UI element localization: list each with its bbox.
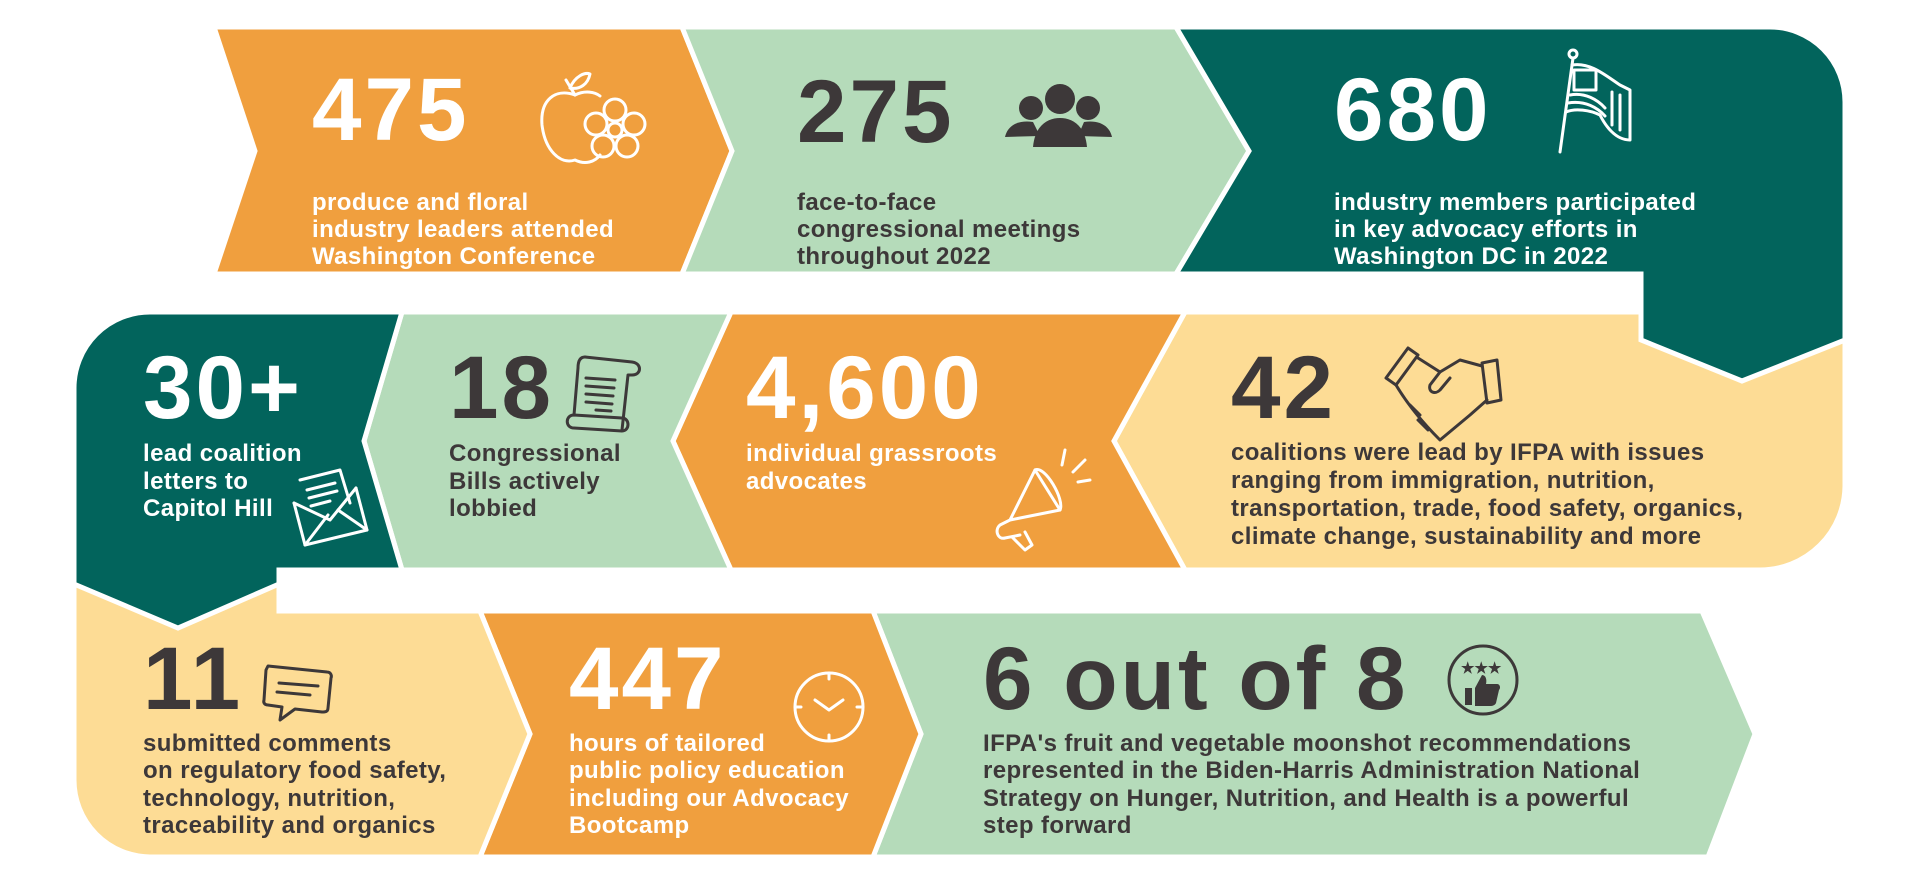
stat 11: submitted comments <box>143 730 392 757</box>
stat 30+: letters to <box>143 468 248 495</box>
stat 475: Washington Conference <box>312 243 596 270</box>
icon: clock <box>795 673 863 741</box>
icon: chat <box>264 666 331 720</box>
stat 275: 275 <box>797 61 954 161</box>
stat 18 <box>449 337 621 522</box>
stat 42: climate change, sustainability and more <box>1231 523 1701 550</box>
stat 18: Congressional <box>449 440 621 467</box>
stat 42: coalitions were lead by IFPA with issues <box>1231 439 1704 466</box>
stat 275: face-to-face <box>797 189 937 216</box>
stat 18: Bills actively <box>449 468 600 495</box>
stat 275 <box>797 61 1081 270</box>
icon: envelope <box>294 470 367 545</box>
panel: row2 teal <box>74 312 402 628</box>
stat 11: on regulatory food safety, <box>143 757 446 784</box>
stat 4,600: advocates <box>746 468 867 495</box>
stat 18: lobbied <box>449 495 537 522</box>
stat 30+: Capitol Hill <box>143 495 273 522</box>
stat 6 out of 8: represented in the Biden-Harris Administration National <box>983 757 1640 784</box>
stat 680: industry members participated <box>1334 189 1696 216</box>
stat 11: traceability and organics <box>143 812 436 839</box>
stat 42: ranging from immigration, nutrition, <box>1231 467 1655 494</box>
stat 4,600: 4,600 <box>746 337 984 437</box>
panel: row1 green <box>682 27 1249 274</box>
stat 475: produce and floral <box>312 189 529 216</box>
stat 447: including our Advocacy <box>569 785 849 812</box>
panel: row2 yellow <box>1114 312 1845 570</box>
icon: people <box>1005 84 1112 147</box>
panel: row2 green <box>364 312 731 570</box>
stat 30+: 30+ <box>143 337 303 437</box>
stat 475 <box>312 59 614 270</box>
stat 680: Washington DC in 2022 <box>1334 243 1608 270</box>
stat 275: congressional meetings <box>797 216 1081 243</box>
panel: row3 yellow <box>74 560 530 857</box>
stat 42: 42 <box>1231 337 1336 437</box>
stat 6 out of 8 <box>983 628 1640 839</box>
stat 30+ <box>143 337 303 522</box>
stat 4,600: individual grassroots <box>746 440 997 467</box>
stat 11 <box>143 628 446 839</box>
stat 6 out of 8: 6 out of 8 <box>983 628 1409 728</box>
icon: apple and flower <box>542 74 645 162</box>
stat 6 out of 8: Strategy on Hunger, Nutrition, and Health is a powerful <box>983 785 1629 812</box>
stat 680: 680 <box>1334 59 1492 159</box>
stat 6 out of 8: step forward <box>983 812 1132 839</box>
panel: row1 teal <box>1176 27 1845 381</box>
stat 447: 447 <box>569 628 726 728</box>
stat 11: technology, nutrition, <box>143 785 395 812</box>
panel: row3 orange <box>480 611 921 857</box>
stat 447: hours of tailored <box>569 730 765 757</box>
stat 447: Bootcamp <box>569 812 690 839</box>
stat 18: 18 <box>449 337 554 437</box>
stat 447: public policy education <box>569 757 845 784</box>
stat 680: in key advocacy efforts in <box>1334 216 1638 243</box>
panel: row1 orange <box>214 27 732 274</box>
icon: thumbs up stars <box>1449 646 1517 714</box>
panel: row3 green <box>873 611 1755 857</box>
icon: flag <box>1560 50 1630 152</box>
stat 4,600 <box>746 337 997 495</box>
stat 275: throughout 2022 <box>797 243 991 270</box>
icon: handshake <box>1386 348 1501 440</box>
panel: row2 orange <box>673 312 1185 570</box>
stat 30+: lead coalition <box>143 440 302 467</box>
icon: thumbs up stars: ★★★ <box>1461 660 1502 677</box>
stat 680 <box>1334 59 1696 270</box>
stat 11: 11 <box>143 628 243 728</box>
stat 6 out of 8: IFPA's fruit and vegetable moonshot recommendations <box>983 730 1631 757</box>
stat 42: transportation, trade, food safety, organics, <box>1231 495 1743 522</box>
icon: scroll <box>567 357 640 431</box>
icon: megaphone <box>997 450 1090 550</box>
stat 475: industry leaders attended <box>312 216 614 243</box>
stat 447 <box>569 628 849 839</box>
stat 42 <box>1231 337 1743 550</box>
stat 475: 475 <box>312 59 470 159</box>
